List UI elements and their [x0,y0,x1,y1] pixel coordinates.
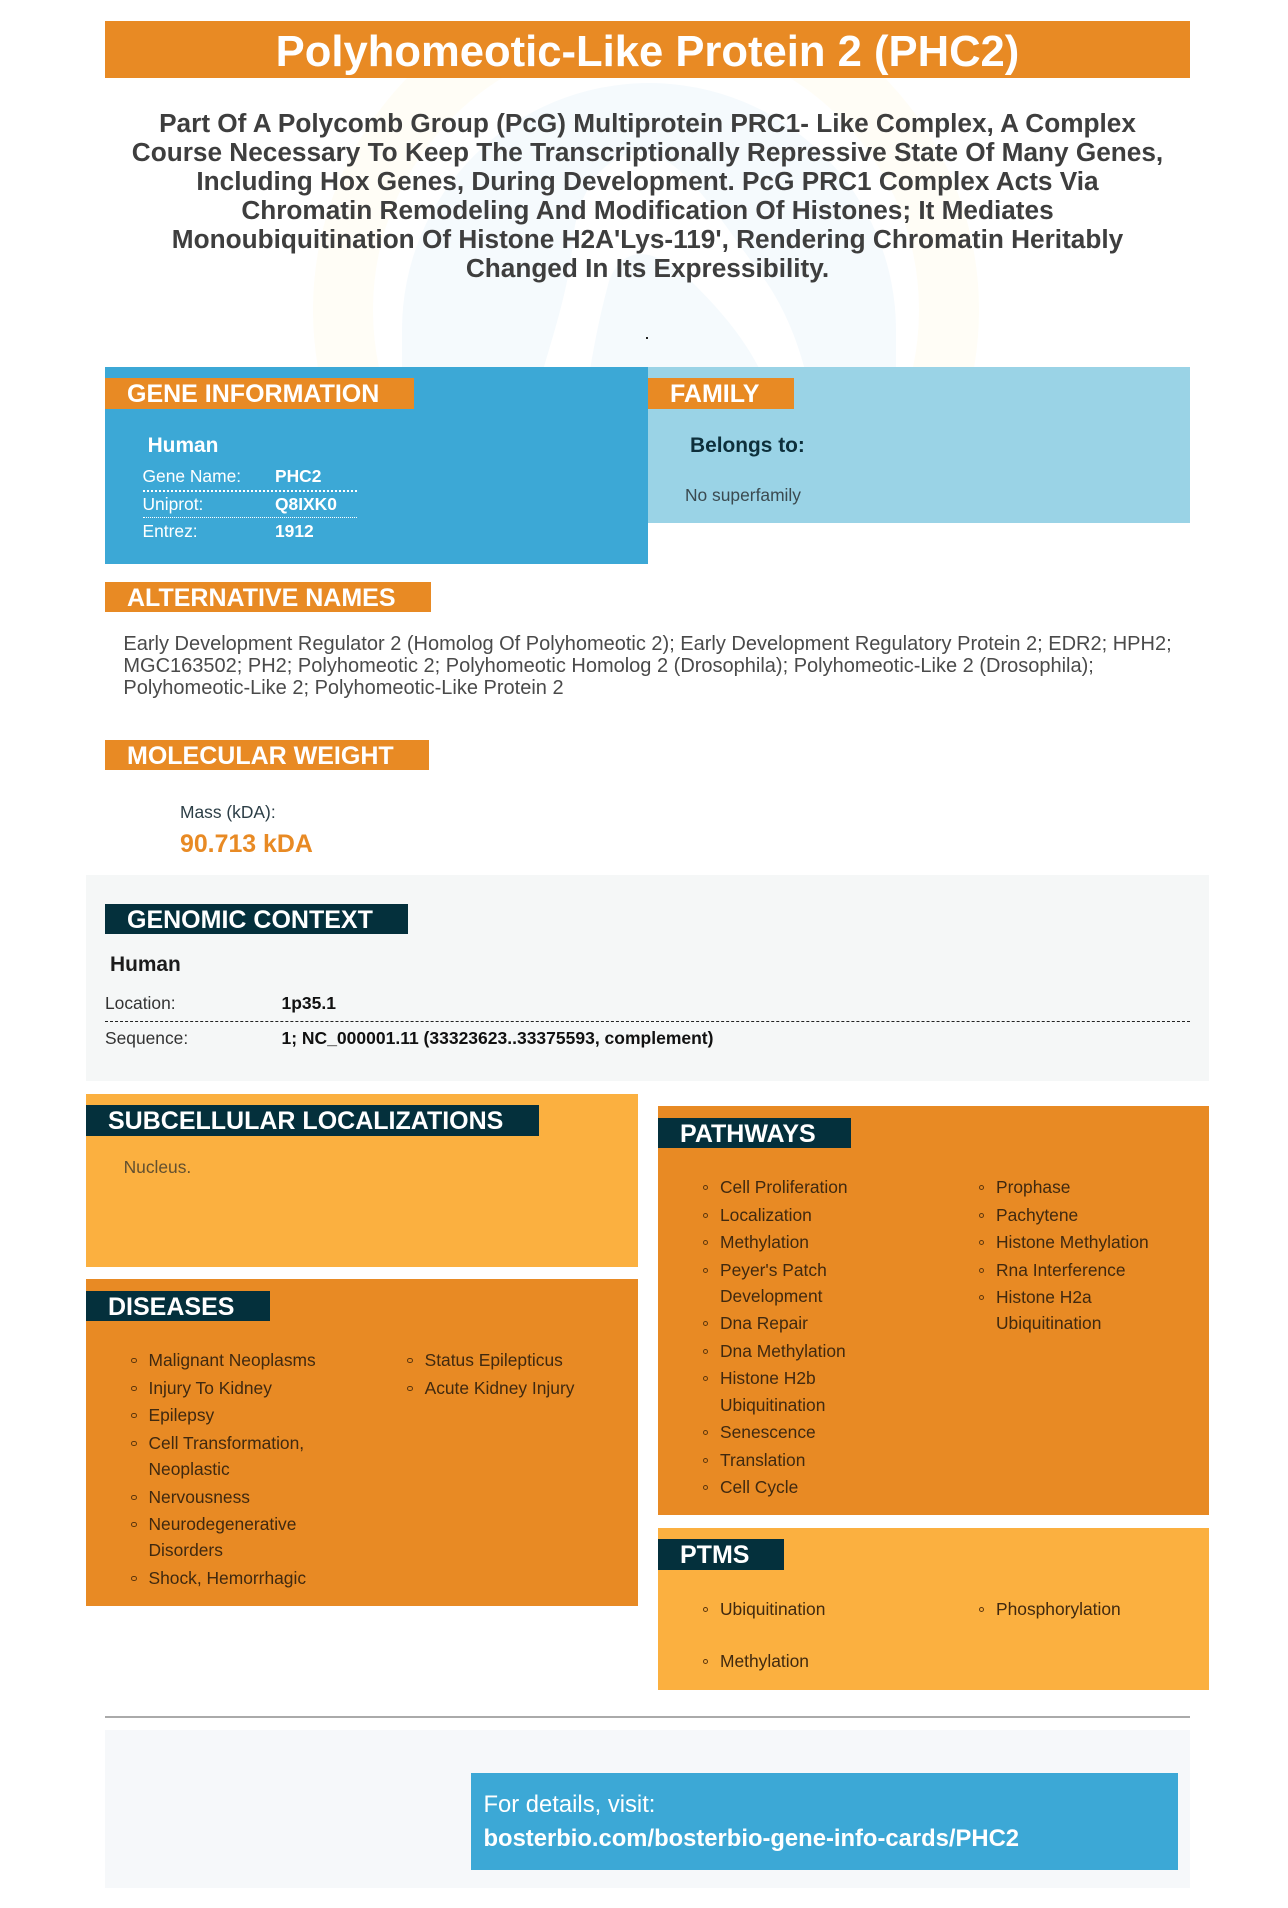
pathway list: Ubiquitination [720,1395,825,1415]
pathway list: Cell Proliferation [720,1177,848,1197]
footer background [105,1730,1190,1888]
panel: diseases [86,1279,638,1606]
pathway list: Histone H2a [996,1287,1092,1307]
disease list: Cell Transformation, [148,1433,304,1453]
panel: molecular weight [105,740,429,858]
location row [105,992,1190,1022]
species: human: Human [148,434,218,457]
alternative names text: Early Development Regulator 2 (Homolog Of Polyhomeotic 2); Early Development Regulatory Protein 2; EDR2; HPH2; [123,633,1172,655]
description: Chromatin Remodeling And Modification Of Histones; It Mediates [241,195,1054,225]
description: Monoubiquitination Of Histone H2A'Lys-119', Rendering Chromatin Heritably [172,224,1123,254]
entrez row [142,521,314,541]
ptm list: Methylation [720,1651,809,1671]
footer [105,1716,1190,1888]
mass value: 90.713 kDA [180,830,313,858]
description [132,108,1163,283]
gene name row: PHC2 [275,466,321,486]
pathway list: Rna Interference [996,1260,1126,1280]
disease list: Malignant Neoplasms [148,1350,316,1370]
disease list: Shock, Hemorrhagic [148,1568,306,1588]
family value: No superfamily [685,485,801,505]
pathway list: Translation [720,1450,805,1470]
heading: family [648,378,794,409]
heading: diseases: DISEASES [108,1293,234,1321]
description: Changed In Its Expressibility. [466,253,829,283]
pathway list: Methylation [720,1232,809,1252]
callout: details link [471,1773,1178,1870]
uniprot row: Q8IXK0 [275,494,337,514]
description: Part Of A Polycomb Group (PcG) Multiprotein PRC1- Like Complex, A Complex [159,108,1136,138]
heading: pathways: PATHWAYS [680,1120,816,1148]
heading: gene information: GENE INFORMATION [127,380,379,408]
pathway list: Localization [720,1205,812,1225]
heading: pathways [658,1118,851,1148]
pathway list: Pachytene [996,1205,1078,1225]
pathway list [703,1177,1149,1497]
species: human: Human [110,953,181,976]
heading: alternative names: ALTERNATIVE NAMES [127,584,396,612]
uniprot row [142,493,357,518]
entrez row: Entrez: [142,521,198,541]
pathway list: Ubiquitination [996,1313,1101,1333]
panel: genomic context [86,875,1209,1081]
disease list: Epilepsy [148,1405,214,1425]
pathway list: Development [720,1286,822,1306]
panel: family [648,367,1190,523]
ptm list: Ubiquitination [720,1599,825,1619]
description: Course Necessary To Keep The Transcriptionally Repressive State Of Many Genes, [132,137,1163,167]
panel: subcellular localizations [86,1094,638,1267]
disease list: Neurodegenerative [148,1514,296,1534]
alternative names text [123,633,1172,699]
panel: pathways [658,1106,1209,1515]
heading: genomic context: GENOMIC CONTEXT [127,906,373,934]
pathway list: Prophase [996,1177,1070,1197]
disease list: Disorders [148,1540,223,1560]
ptm list [703,1599,1121,1671]
dot mark [646,337,648,339]
disease list: Acute Kidney Injury [425,1378,574,1398]
gene name row [142,465,357,492]
disease list: Neoplastic [148,1459,230,1479]
belongs to label: Belongs to: [690,434,805,457]
pathway list: Dna Methylation [720,1341,846,1361]
heading: subcellular localizations: SUBCELLULAR LOCALIZATIONS [108,1107,503,1135]
localization text: Nucleus. [124,1157,191,1177]
heading: family: FAMILY [670,380,759,408]
panel: alternative names [105,582,1172,699]
callout: details link: bosterbio.com/bosterbio-gene-info-cards/PHC2 [484,1825,1019,1852]
heading: ptms: PTMS [680,1541,749,1569]
location row: Location: [105,993,176,1013]
pathway list: Histone Methylation [996,1232,1149,1252]
uniprot row: Uniprot: [142,494,203,514]
pathway list: Cell Cycle [720,1477,798,1497]
ptm list: Phosphorylation [996,1599,1121,1619]
panel: ptms [658,1528,1209,1690]
description: Including Hox Genes, During Development. PcG PRC1 Complex Acts Via [196,166,1099,196]
title [105,21,1190,78]
mass label: Mass (kDA): [180,802,276,822]
background watermark [313,78,979,367]
disease list: Nervousness [148,1487,250,1507]
callout: details link: For details, visit: [484,1791,655,1818]
pathway list: Senescence [720,1422,816,1442]
heading: ptms [658,1539,784,1570]
alternative names text: Polyhomeotic-Like 2; Polyhomeotic-Like Protein 2 [123,677,564,699]
alternative names text: MGC163502; PH2; Polyhomeotic 2; Polyhomeotic Homolog 2 (Drosophila); Polyhomeotic-Like 2 (Drosophila); [123,655,1094,677]
sequence row: 1; NC_000001.11 (33323623..33375593, complement) [282,1028,713,1048]
disease list: Status Epilepticus [425,1350,563,1370]
title: Polyhomeotic-Like Protein 2 (PHC2) [276,28,1019,76]
disease list [131,1350,574,1588]
disease list: Injury To Kidney [148,1378,272,1398]
heading: molecular weight: MOLECULAR WEIGHT [127,742,394,770]
gene name row: Gene Name: [142,466,241,486]
pathway list: Histone H2b [720,1368,816,1388]
entrez row: 1912 [275,521,314,541]
pathway list: Peyer's Patch [720,1260,827,1280]
pathway list: Dna Repair [720,1313,808,1333]
sequence row: Sequence: [105,1028,188,1048]
location row: 1p35.1 [282,993,336,1013]
heading: diseases [86,1291,270,1321]
panel: gene information [105,367,648,564]
